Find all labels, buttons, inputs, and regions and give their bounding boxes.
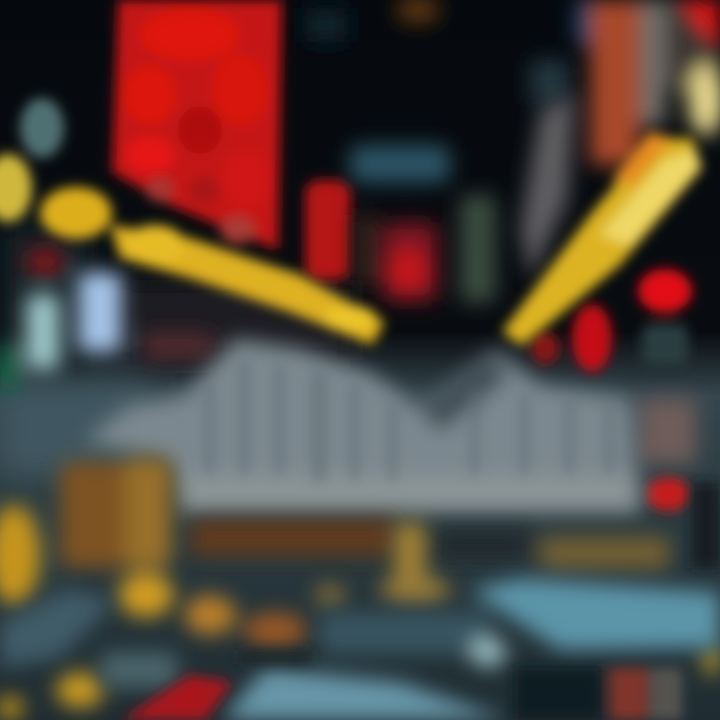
panel: orange debris foreground: [0, 583, 720, 720]
lights: yellow beam left: [0, 98, 385, 345]
lights: left storefront windows: [0, 247, 214, 389]
panel: red building facade: [112, 0, 351, 280]
grid: facade texture on grey band: [205, 360, 614, 482]
background tones: street and left storefront: [0, 225, 350, 590]
panel: golden block left: [0, 458, 451, 617]
panel: bottom dark and red accents: [122, 482, 720, 720]
panel: brown wooden band: [190, 520, 670, 570]
panel: teal lower surfaces: [0, 578, 720, 720]
panel: right building columns: [520, 0, 720, 280]
lights: yellow beam right: [502, 132, 702, 346]
panel: grey central building band: [85, 338, 696, 513]
lights: red signals on right: [531, 269, 692, 511]
panel: dark tower with blue sign: [305, 0, 570, 303]
